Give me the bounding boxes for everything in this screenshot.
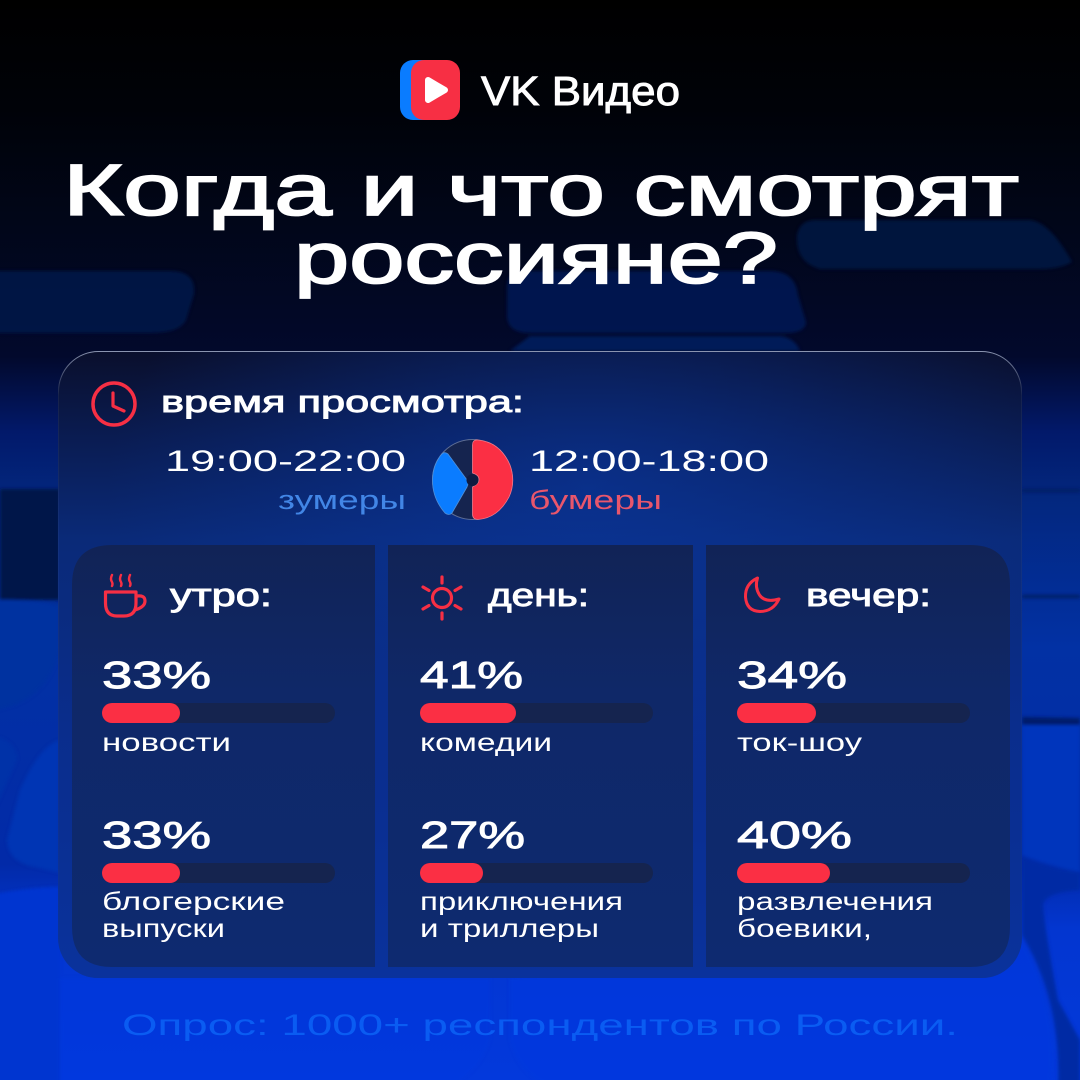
logo wordmark: VK Видео bbox=[481, 68, 680, 114]
boomers time: 12:00-18:00 bbox=[529, 445, 769, 478]
stat: blogger shows 33%: выпуски bbox=[102, 915, 225, 943]
heading: evening: вечер: bbox=[806, 577, 931, 613]
stat: entertainment, action 40% bbox=[737, 815, 970, 943]
stat: entertainment, action 40%: боевики, bbox=[737, 915, 872, 943]
icon: clock bbox=[93, 383, 135, 425]
logo: VK Видео bbox=[400, 60, 680, 120]
panel: day bbox=[388, 545, 693, 967]
stat: entertainment, action 40%: 40% bbox=[737, 815, 852, 857]
stat: talk shows 34%: 34% bbox=[737, 655, 847, 697]
stat: adventures and thrillers 27%: приключения bbox=[420, 888, 623, 916]
zoomers time: зумеры bbox=[278, 485, 406, 515]
panel: morning bbox=[72, 545, 375, 967]
heading: viewing time: время просмотра: bbox=[161, 384, 524, 419]
heading: day: день: bbox=[488, 577, 589, 613]
stat: news 33%: 33% bbox=[102, 655, 211, 697]
footer: survey note: Опрос: 1000+ респондентов по России. bbox=[122, 1009, 958, 1042]
stat: adventures and thrillers 27%: и триллеры bbox=[420, 915, 599, 943]
icon: moon bbox=[745, 578, 779, 612]
stat: comedies 41%: 41% bbox=[420, 655, 523, 697]
stat: talk shows 34%: ток-шоу bbox=[737, 729, 863, 757]
title: россияне? bbox=[294, 219, 778, 299]
title bbox=[63, 151, 1019, 299]
zoomers time: 19:00-22:00 bbox=[165, 445, 406, 478]
stat: news 33% bbox=[102, 655, 335, 757]
stat: comedies 41% bbox=[420, 655, 653, 757]
stat: adventures and thrillers 27% bbox=[420, 815, 653, 943]
boomers time bbox=[529, 445, 769, 515]
panel: evening bbox=[706, 545, 1010, 967]
stat: blogger shows 33% bbox=[102, 815, 335, 943]
chart: viewing time clock pie bbox=[432, 440, 513, 520]
stat: talk shows 34% bbox=[737, 655, 970, 757]
heading: morning: утро: bbox=[170, 577, 272, 613]
stat: adventures and thrillers 27%: 27% bbox=[420, 815, 525, 857]
stat: entertainment, action 40%: развлечения bbox=[737, 888, 933, 916]
icon: coffee cup bbox=[106, 575, 145, 616]
icon: VK Видео play logo bbox=[400, 60, 460, 120]
stat: blogger shows 33%: блогерские bbox=[102, 888, 285, 916]
zoomers time bbox=[165, 445, 406, 515]
title: Когда и что смотрят bbox=[63, 151, 1019, 231]
icon: sun bbox=[423, 577, 461, 619]
boomers time: бумеры bbox=[529, 485, 662, 515]
stat: news 33%: новости bbox=[102, 729, 231, 757]
stat: blogger shows 33%: 33% bbox=[102, 815, 211, 857]
panel: viewing time bbox=[58, 351, 1022, 978]
stat: comedies 41%: комедии bbox=[420, 729, 552, 757]
